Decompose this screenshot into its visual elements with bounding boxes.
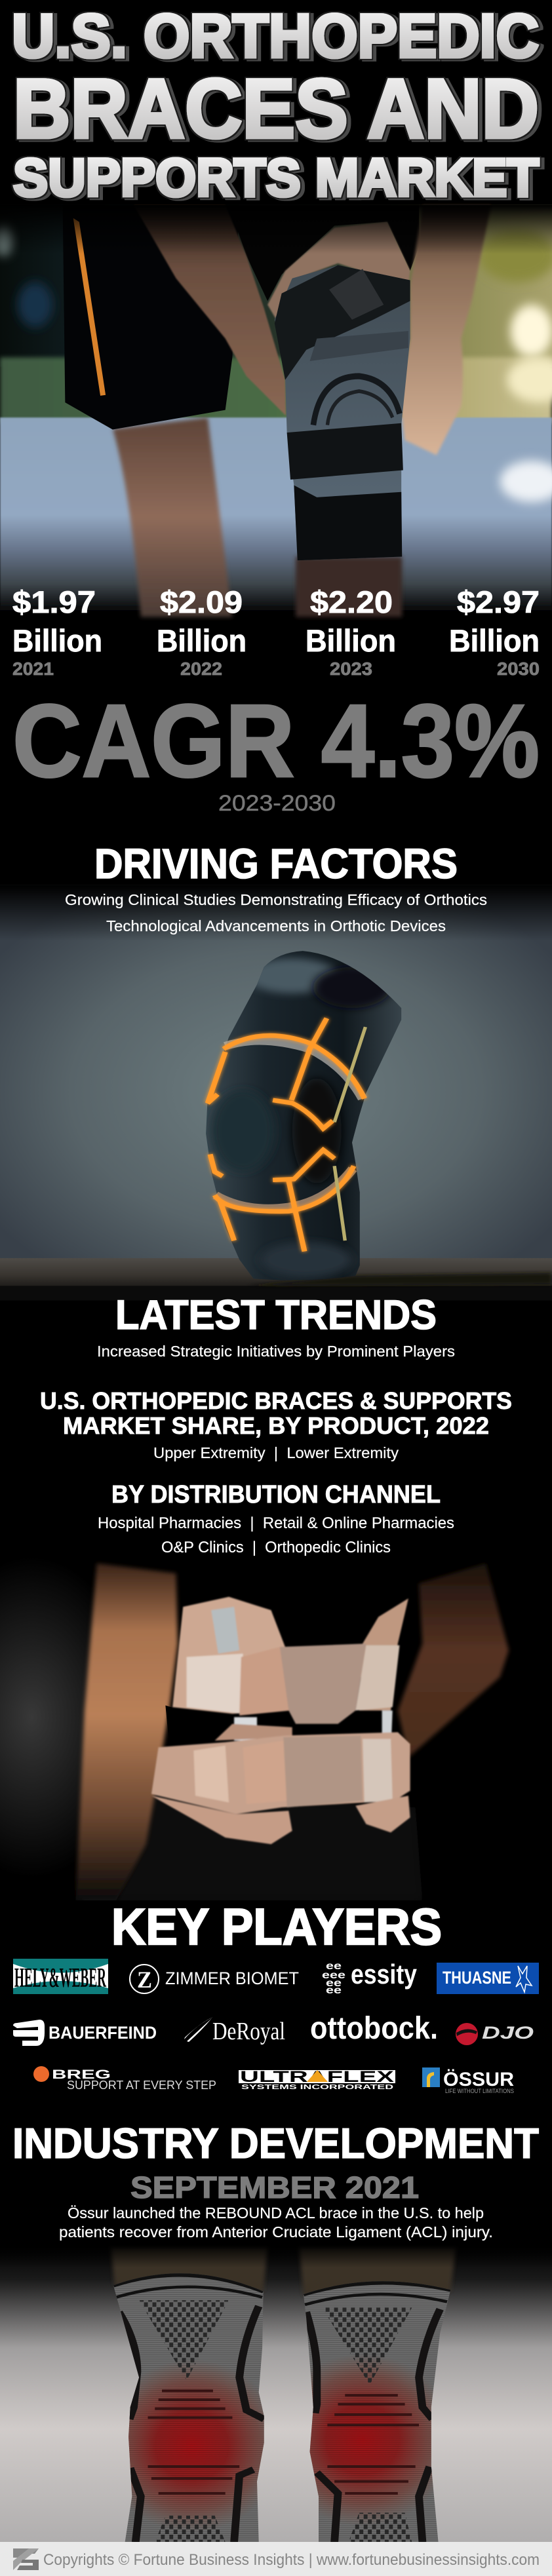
stat 2021: Billion — [12, 623, 102, 658]
logo: Bauerfeind: BAUERFEIND — [49, 2023, 157, 2043]
heading: market share by product — [40, 1387, 512, 1439]
logos: key players: HELY&WEBER — [14, 1963, 106, 1993]
stat 2022: $2.09 — [160, 585, 243, 619]
photo: back brace — [0, 1557, 509, 1900]
logo: Zimmer Biomet — [130, 1965, 299, 1993]
logo: Essity — [322, 1959, 418, 1996]
logo: Breg — [33, 2066, 216, 2092]
logo: Essity: eee — [322, 1970, 345, 1981]
logo: DeRoyal: DeRoyal — [212, 2018, 285, 2045]
stat 2023: $2.20 — [310, 585, 393, 619]
logo: Ottobock: ottobock. — [310, 2011, 438, 2046]
footer logo — [13, 2548, 39, 2570]
logo: Essity: ee — [326, 1985, 342, 1996]
logo: Thuasne: THUASNE — [443, 1968, 511, 1988]
latest trends text: Increased Strategic Initiatives by Prominent Players — [97, 1343, 455, 1360]
stat 2030 — [449, 585, 540, 679]
logo: Ultraflex — [239, 2068, 395, 2091]
heading: market share by product: MARKET SHARE, BY PRODUCT, 2022 — [63, 1412, 489, 1439]
stat 2030: $2.97 — [457, 585, 540, 619]
footer bar — [0, 2542, 552, 2576]
logo: Essity: ee — [326, 1961, 342, 1972]
stat 2023 — [306, 585, 396, 679]
CAGR period: 2023-2030 — [218, 791, 336, 816]
logo: Bauerfeind — [13, 2020, 157, 2046]
logo: Ossur: ÖSSUR — [443, 2069, 514, 2090]
driving factors list: Technological Advancements in Orthotic Devices — [106, 917, 446, 934]
stat 2023: 2023 — [330, 659, 372, 679]
stat 2021 — [12, 585, 102, 679]
stat 2022 — [157, 585, 246, 679]
logo: DJO — [456, 2023, 534, 2045]
product segments: Upper Extremity | Lower Extremity — [153, 1444, 399, 1461]
logos: key players — [13, 1959, 539, 2094]
development description — [59, 2204, 493, 2240]
heading: by distribution channel: BY DISTRIBUTION CHANNEL — [111, 1481, 441, 1509]
development description: Össur launched the REBOUND ACL brace in the U.S. to help — [68, 2204, 484, 2221]
heading: industry development: INDUSTRY DEVELOPMENT — [12, 2119, 539, 2167]
logo: Zimmer Biomet: Z — [137, 1967, 152, 1993]
logo: Ossur: LIFE WITHOUT LIMITATIONS — [445, 2088, 514, 2094]
logo: Ultraflex: ULTRAFLEX — [240, 2068, 394, 2086]
heading: driving factors: DRIVING FACTORS — [94, 840, 458, 887]
photo: man fitting knee brace — [0, 205, 552, 617]
market size figures — [12, 585, 540, 679]
sleeves — [113, 2273, 451, 2542]
logo: Thuasne — [437, 1963, 539, 1994]
title: U.S. ORTHOPEDIC — [12, 1, 539, 70]
logo: Breg: SUPPORT AT EVERY STEP — [67, 2079, 216, 2092]
distribution segments — [98, 1514, 454, 1556]
stat 2030: Billion — [449, 623, 540, 658]
stat 2030: 2030 — [497, 659, 540, 679]
driving factors list — [65, 891, 487, 934]
distribution segments: O&P Clinics | Orthopedic Clinics — [161, 1539, 391, 1556]
heading: key players: KEY PLAYERS — [111, 1898, 442, 1955]
stat 2021: 2021 — [12, 659, 54, 679]
title: SUPPORTS MARKET — [13, 148, 539, 208]
development date: SEPTEMBER 2021 — [130, 2170, 419, 2204]
logo: Essity: essity — [351, 1959, 418, 1990]
logo: Hely & Weber — [13, 1959, 108, 1994]
development description: patients recover from Anterior Cruciate Ligament (ACL) injury. — [59, 2223, 493, 2240]
title — [12, 1, 539, 208]
stat 2022: Billion — [157, 623, 246, 658]
photo: glowing knee brace — [0, 885, 552, 1301]
logo: Ultraflex: SYSTEMS INCORPORATED — [241, 2084, 393, 2091]
logo: DeRoyal — [184, 2017, 285, 2045]
stat 2023: Billion — [306, 623, 396, 658]
logo: Breg: BREG — [52, 2068, 111, 2082]
stat 2022: 2022 — [180, 659, 222, 679]
heading: market share by product: U.S. ORTHOPEDIC BRACES & SUPPORTS — [40, 1387, 512, 1414]
driving factors list: Growing Clinical Studies Demonstrating Efficacy of Orthotics — [65, 891, 487, 908]
logo: Zimmer Biomet: ZIMMER BIOMET — [165, 1969, 299, 1988]
logo: DJO: DJO — [482, 2023, 534, 2043]
distribution segments: Hospital Pharmacies | Retail & Online Pharmacies — [98, 1514, 454, 1532]
logo: Essity: ee — [326, 1978, 342, 1989]
stat 2021: $1.97 — [12, 585, 96, 619]
heading: latest trends: LATEST TRENDS — [115, 1292, 437, 1338]
logo: Ossur — [422, 2067, 514, 2094]
photo: knee sleeves with red glow — [0, 2244, 552, 2544]
